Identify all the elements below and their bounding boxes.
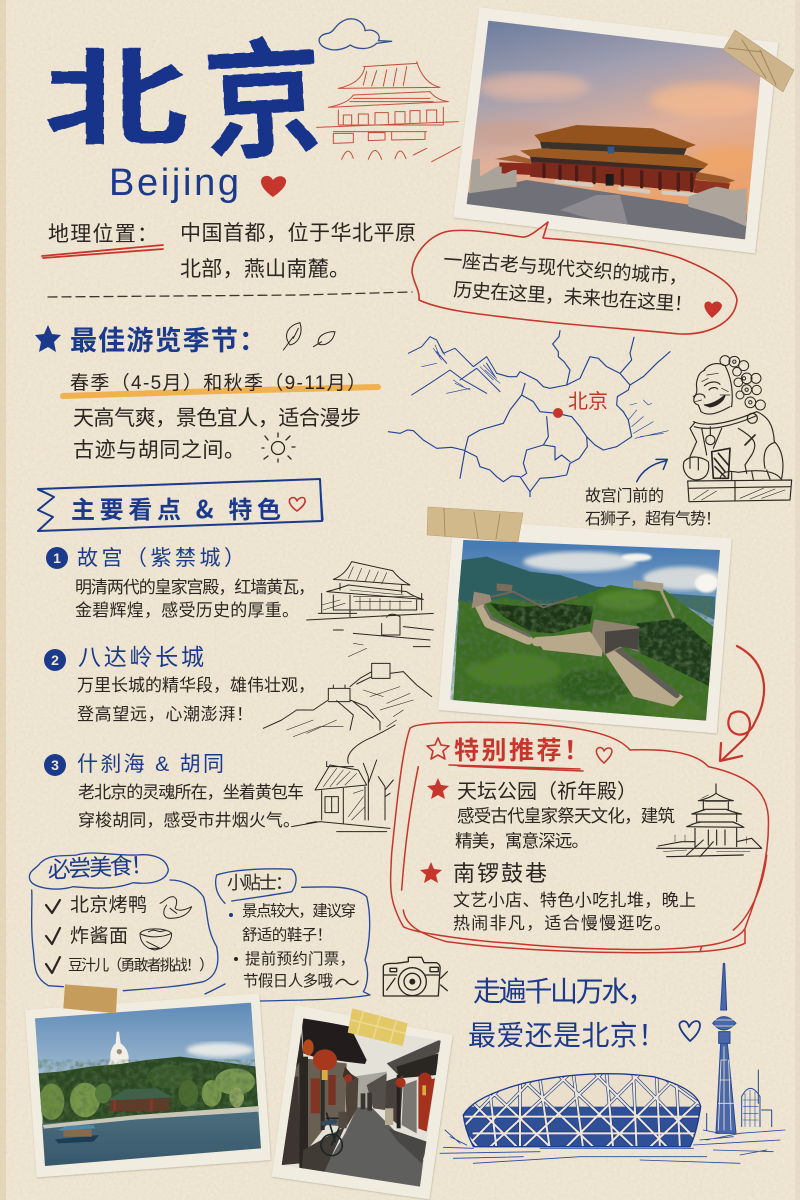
text: months: 春季（4-5月）和秋季（9-11月） xyxy=(70,372,366,394)
text: noodles: 炸酱面 xyxy=(70,925,128,947)
icon: bowl xyxy=(140,929,172,950)
checks xyxy=(46,900,60,973)
title: 北京: 京 xyxy=(198,0,328,186)
heading underline xyxy=(449,765,583,771)
map marker: Beijing xyxy=(553,390,608,418)
arrow: to lion xyxy=(637,459,667,482)
text: bubble line 1: 一座古老与现代交织的城市， xyxy=(443,249,689,289)
text: douzhi: 豆汁儿（勇敢者挑战！） xyxy=(68,957,214,974)
panel: must-try food xyxy=(29,851,218,991)
icon: outline star xyxy=(427,738,449,759)
icon: star xyxy=(35,325,61,352)
item 2: Great Wall xyxy=(44,644,315,724)
text: tip 1 line 2: 舒适的鞋子！ xyxy=(242,926,332,944)
panel: special recommendation xyxy=(391,722,768,953)
description: Nanluoguxiang line 2: 热闹非凡，适合慢慢逛吃。 xyxy=(453,913,671,933)
closing line 2: 最爱还是北京！ xyxy=(468,1020,666,1051)
title: Nanluoguxiang: 南锣鼓巷 xyxy=(453,861,547,886)
speech bubble: red xyxy=(412,222,737,334)
tape and photo: hutong xyxy=(272,1005,453,1199)
ground hatching xyxy=(440,1130,785,1163)
highlight bar xyxy=(63,387,378,396)
icon: outline heart xyxy=(679,1021,700,1041)
sketch: Bird's Nest stadium and tower xyxy=(440,963,785,1163)
description line 1: 明清两代的皇家宫殿，红墙黄瓦， xyxy=(75,578,315,597)
bullet 2 xyxy=(234,957,238,961)
item 3: Shichahai xyxy=(44,753,304,830)
underline: red xyxy=(42,245,163,258)
text: tip 2 line 1: 提前预约门票， xyxy=(245,950,355,968)
caption: stone lion: 故宫门前的 xyxy=(585,487,664,505)
closing message xyxy=(468,976,700,1051)
bubble outline xyxy=(32,880,218,991)
photo: Forbidden City xyxy=(453,7,778,253)
label: 北京: 北京 xyxy=(568,390,608,413)
icon: duck xyxy=(160,897,192,918)
description: Temple line 2: 精美，寓意深远。 xyxy=(455,831,589,851)
sketch: hutong house xyxy=(292,725,395,832)
description line 2: 金碧辉煌，感受历史的厚重。 xyxy=(75,601,299,620)
title: 故宫（紫禁城） xyxy=(77,547,245,570)
title: 北京 xyxy=(43,0,328,186)
text: description 1: 天高气爽，景色宜人，适合漫步 xyxy=(73,407,361,430)
map xyxy=(388,331,670,497)
sketch: Great Wall xyxy=(263,643,432,737)
title: 八达岭长城 xyxy=(78,644,204,670)
wave xyxy=(336,979,358,985)
description line 1: 万里长城的精华段，雄伟壮观， xyxy=(77,676,315,695)
caption line 2: 石狮子，超有气势！ xyxy=(585,510,721,528)
text: location line 1: 中国首都，位于华北平原 xyxy=(180,222,416,245)
stadium xyxy=(464,1074,700,1146)
heading: best season: 最佳游览季节： xyxy=(70,319,266,358)
section: best season xyxy=(35,319,378,462)
icon: camera xyxy=(383,957,447,996)
title: 什刹海 & 胡同 xyxy=(77,753,224,776)
text: description 2: 古迹与胡同之间。 xyxy=(73,439,245,462)
icon: outline heart xyxy=(289,498,305,511)
sketch: Temple of Heaven xyxy=(657,784,762,857)
arrow: red loop xyxy=(720,646,764,761)
tape: Beihai xyxy=(63,984,117,1013)
icon: red star 2 xyxy=(420,862,442,883)
subtitle: Beijing: Beijing xyxy=(109,162,239,204)
rivers and borders xyxy=(388,331,670,497)
tower xyxy=(707,963,772,1133)
description line 1: 老北京的灵魂所在，坐着黄包车 xyxy=(78,783,304,802)
block: geography xyxy=(42,222,416,281)
icon: bubble heart xyxy=(704,301,722,318)
icon: outline heart xyxy=(596,748,612,763)
item 1: Forbidden City: 1 xyxy=(53,550,61,566)
tips heading frame xyxy=(216,869,296,903)
heading text: 主要看点 & 特色 xyxy=(71,490,281,525)
header: highlights xyxy=(38,479,323,531)
sketch: palace xyxy=(307,562,433,647)
tape: hutong xyxy=(348,1008,408,1046)
text: roast duck: 北京烤鸭 xyxy=(70,894,147,916)
label: 地理位置: 地理位置： xyxy=(48,223,158,246)
cloud heading frame xyxy=(29,853,168,889)
description line 2: 登高望远，心潮澎湃！ xyxy=(77,705,253,724)
item 1: Forbidden City xyxy=(46,547,315,620)
bullet 1 xyxy=(229,913,233,917)
text: location line 2: 北部，燕山南麓。 xyxy=(180,258,350,281)
box outline xyxy=(391,722,768,953)
text: bubble line 2: 历史在这里，未来也在这里！ xyxy=(453,279,694,316)
panel: tips xyxy=(205,869,370,1001)
sketch: red palace xyxy=(317,62,460,162)
tape: top right xyxy=(723,30,794,92)
text: tip 1 line 1: 景点较大，建议穿 xyxy=(242,902,356,920)
photo: Great Wall xyxy=(438,519,732,733)
icon: sun xyxy=(262,433,295,462)
heading: 小贴士： xyxy=(227,873,293,893)
tape and photo: Beihai xyxy=(25,984,271,1177)
mountains xyxy=(408,337,500,395)
heading: 必尝美食！ xyxy=(47,851,154,883)
icon: leaves xyxy=(283,323,335,350)
icon: red heart xyxy=(261,176,286,197)
description line 2: 穿梭胡同，感受市井烟火气。 xyxy=(78,811,300,830)
title: 北京: 北 xyxy=(43,13,189,167)
item 2: Great Wall: 2 xyxy=(51,652,59,668)
sketch: stone lion xyxy=(683,356,792,502)
caption: stone lion xyxy=(585,487,721,528)
description: Nanluoguxiang line 1: 文艺小店、特色小吃扎堆，晚上 xyxy=(453,891,696,910)
tape: Great Wall photo xyxy=(427,507,523,542)
text: tip 2 line 2: 节假日人多哦 xyxy=(243,972,333,990)
title: Temple of Heaven: 天坛公园（祈年殿） xyxy=(457,780,637,803)
description: Temple line 1: 感受古代皇家祭天文化，建筑 xyxy=(457,806,675,826)
icon: cloud xyxy=(319,19,392,50)
icon: red star 1 xyxy=(427,778,449,799)
photo: Beihai xyxy=(25,993,271,1177)
heading: 特别推荐！ xyxy=(454,731,589,767)
photo: hutong xyxy=(272,1005,453,1199)
tips outline xyxy=(205,887,370,1001)
item 3: Shichahai: 3 xyxy=(51,757,59,773)
closing message: 走遍千山万水， xyxy=(473,976,655,1007)
